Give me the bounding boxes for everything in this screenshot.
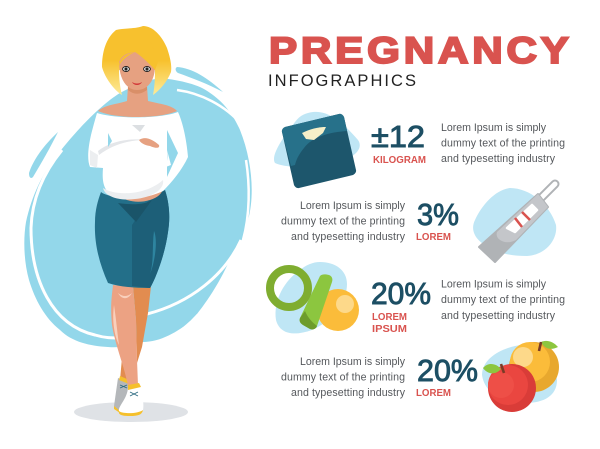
back leg — [133, 286, 151, 363]
stat: 12 kilogram: KILOGRAM — [373, 155, 426, 166]
woman figure — [74, 26, 188, 422]
text block 1: dummy text of the printing — [441, 138, 565, 150]
stat: 20 percent lorem ipsum — [371, 276, 431, 335]
stat: 20 percent lorem ipsum: IPSUM — [372, 324, 407, 335]
hand on belly — [139, 138, 159, 148]
eyes and mouth — [123, 66, 129, 72]
face — [119, 52, 155, 90]
text block 2 — [281, 200, 406, 243]
floor shadow — [74, 402, 188, 422]
subtitle: INFOGRAPHICS — [268, 72, 416, 90]
text block 3: Lorem Ipsum is simply — [441, 278, 547, 290]
text block 3: and typesetting industry — [441, 310, 556, 322]
text block 2: and typesetting industry — [291, 231, 406, 243]
text block 4: Lorem Ipsum is simply — [300, 356, 406, 368]
fringe — [119, 40, 158, 70]
stat: 20 percent lorem ipsum: 20% — [371, 276, 431, 311]
title: PREGNANCY — [269, 31, 569, 72]
text block 1: and typesetting industry — [441, 153, 556, 165]
text block 4: dummy text of the printing — [281, 372, 405, 384]
text block 3: dummy text of the printing — [441, 294, 565, 306]
stat: 12 kilogram: ±12 — [371, 119, 425, 154]
background blob with swooshes — [24, 67, 252, 352]
front leg — [111, 285, 138, 386]
white top — [88, 112, 188, 198]
icon: fruit — [482, 341, 559, 412]
skirt — [95, 190, 169, 288]
belly skin — [122, 187, 162, 202]
text block 3 — [441, 278, 565, 322]
hair — [102, 26, 171, 95]
text block 1 — [441, 122, 565, 165]
stat: 20 percent lorem: LOREM — [416, 388, 451, 399]
stat: 20 percent lorem ipsum: LOREM — [372, 312, 407, 323]
torso skin — [98, 86, 177, 117]
stat: 12 kilogram — [371, 119, 426, 166]
text block 2: dummy text of the printing — [281, 216, 405, 228]
text block 2: Lorem Ipsum is simply — [300, 200, 406, 212]
text block 4: and typesetting industry — [291, 387, 406, 399]
icon: pacifier — [270, 262, 359, 333]
back shoe — [114, 378, 128, 412]
front shoe — [119, 386, 143, 414]
icon: weighing scale — [274, 112, 360, 188]
stat: 20 percent lorem: 20% — [417, 353, 478, 388]
text block 4 — [281, 356, 406, 399]
stat: 3 percent: LOREM — [416, 232, 451, 243]
stat: 3 percent: 3% — [417, 197, 459, 232]
text block 1: Lorem Ipsum is simply — [441, 122, 547, 134]
icon: pregnancy test — [473, 184, 556, 262]
